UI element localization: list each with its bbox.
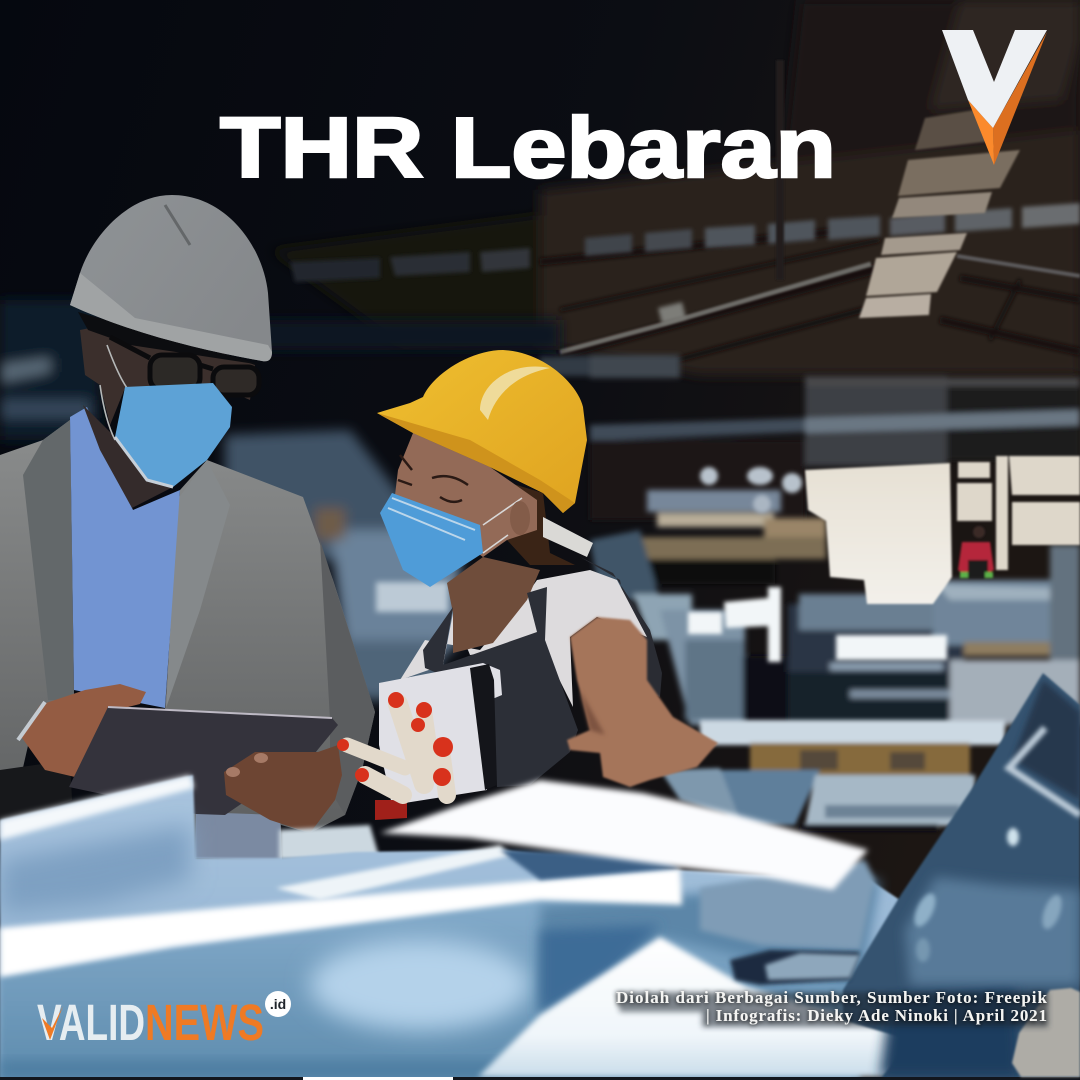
back doorway light xyxy=(805,463,952,604)
ceiling pipes xyxy=(560,60,1080,352)
woman: brows and eyes xyxy=(398,455,468,502)
woman: collar xyxy=(543,517,593,557)
man: right hand xyxy=(224,745,342,833)
logo: V mark xyxy=(942,30,1047,165)
foreground metal parts xyxy=(0,673,1080,1080)
foreground: screw xyxy=(765,953,860,980)
woman: ear loop xyxy=(483,498,522,553)
ceiling planks xyxy=(270,0,1080,375)
foreground: blue shadow under sheet xyxy=(500,850,680,880)
foreground: bottom white strip xyxy=(303,1077,453,1080)
woman: neck xyxy=(447,557,540,653)
man: neck xyxy=(83,405,173,508)
man: left cuff xyxy=(18,702,45,740)
logo: VALID wordmark: VALID xyxy=(37,994,145,1051)
man: surgical mask xyxy=(115,383,232,487)
ceiling light patch xyxy=(658,302,686,324)
woman: hair xyxy=(490,477,575,565)
logo: .id badge xyxy=(265,991,291,1017)
credits: line 2: | Infografis: Dieky Ade Ninoki | April 2021 xyxy=(706,1006,1047,1025)
man: white hard hat xyxy=(70,195,272,361)
right windows xyxy=(957,456,1080,570)
woman: face xyxy=(395,433,537,557)
foreground: white sheet xyxy=(380,780,868,890)
woman: arm shade xyxy=(580,690,605,735)
man: shirt xyxy=(70,407,180,708)
woman: ear xyxy=(510,501,530,535)
foreground: white triangle plate xyxy=(478,937,916,1077)
foreground: right blue block xyxy=(540,880,880,1015)
man: tablet xyxy=(69,707,338,815)
logo: .id badge: .id xyxy=(270,996,286,1012)
foreground: bottom shade xyxy=(0,1060,500,1080)
man: right lapel xyxy=(166,460,230,708)
left bright machine xyxy=(376,582,448,612)
foreground: left block shading xyxy=(0,825,190,915)
man: glasses xyxy=(110,337,259,395)
woman: back strap xyxy=(580,557,662,697)
foreground: upper dark facet xyxy=(1012,680,1080,800)
man: left hand xyxy=(20,684,146,777)
man in white hard hat xyxy=(0,195,375,860)
credits xyxy=(616,988,1048,1027)
foreground: corner highlight xyxy=(1009,728,1080,815)
middle machines xyxy=(590,490,1080,725)
logo: NEWS wordmark: NEWS xyxy=(145,994,264,1051)
woman: t-shirt xyxy=(400,570,647,707)
woman: mask pleats xyxy=(388,498,475,540)
foreground: pale backdrop under hands xyxy=(279,825,380,860)
ceiling beam xyxy=(290,203,1080,282)
ceiling skylights xyxy=(859,105,1020,318)
woman: helmet band xyxy=(377,413,575,513)
bright highlights xyxy=(688,467,947,662)
foreground: dark lower wedge xyxy=(540,925,660,1015)
credits: shadow xyxy=(616,992,1048,1027)
foreground: screw area xyxy=(730,950,860,985)
woman: overall bib xyxy=(423,587,578,787)
logo: VALIDNEWS xyxy=(37,991,291,1051)
woman: clipboard paper xyxy=(379,663,502,805)
foreground: right metal plate xyxy=(905,877,1080,985)
woman in yellow hard hat xyxy=(337,350,718,820)
distant worker xyxy=(958,526,994,578)
man: ear loop xyxy=(100,345,127,440)
foreground: metal holes xyxy=(910,828,1066,962)
foreground: upper white strip xyxy=(276,845,512,900)
man: shirt bottom xyxy=(195,812,282,860)
man: left lapel xyxy=(23,420,74,700)
woman: helmet highlight xyxy=(480,366,550,420)
man: mask edge xyxy=(115,437,173,487)
foreground: long white bar xyxy=(0,868,682,977)
left side blurred racks xyxy=(0,300,560,700)
near pallet and trays xyxy=(660,720,1005,831)
foreground: left block highlight xyxy=(0,775,194,840)
woman: gloves xyxy=(337,692,453,820)
foreground: bottom edge strip xyxy=(0,1077,1080,1080)
title: THR Lebaran xyxy=(220,101,836,196)
foreground: right dark metal xyxy=(843,673,1080,1080)
foreground: center glow xyxy=(310,940,530,1030)
ceiling dark joists xyxy=(540,228,1080,370)
logo: V accent xyxy=(42,1006,63,1040)
far beam and wall xyxy=(540,355,1080,520)
man: finger nails xyxy=(226,753,268,777)
foreground: main sheet body xyxy=(0,775,900,1080)
woman: yellow hard hat xyxy=(377,350,587,513)
man: hair xyxy=(78,312,262,365)
woman: clipboard band xyxy=(470,664,497,790)
torn paper corner xyxy=(1012,988,1080,1077)
woman: surgical mask xyxy=(380,493,483,587)
foreground: lower right dark xyxy=(880,985,1020,1077)
credits: line 1: Diolah dari Berbagai Sumber, Sumber Foto: Freepik xyxy=(616,988,1048,1007)
man: dark waist xyxy=(0,760,72,825)
man: jacket xyxy=(0,420,375,860)
woman: arm xyxy=(567,617,718,787)
man: tablet top edge xyxy=(108,707,332,718)
man: head xyxy=(80,320,255,425)
man: sleeve xyxy=(320,540,375,815)
foreground: lower body xyxy=(0,880,860,1080)
foreground: grey block xyxy=(700,860,875,950)
